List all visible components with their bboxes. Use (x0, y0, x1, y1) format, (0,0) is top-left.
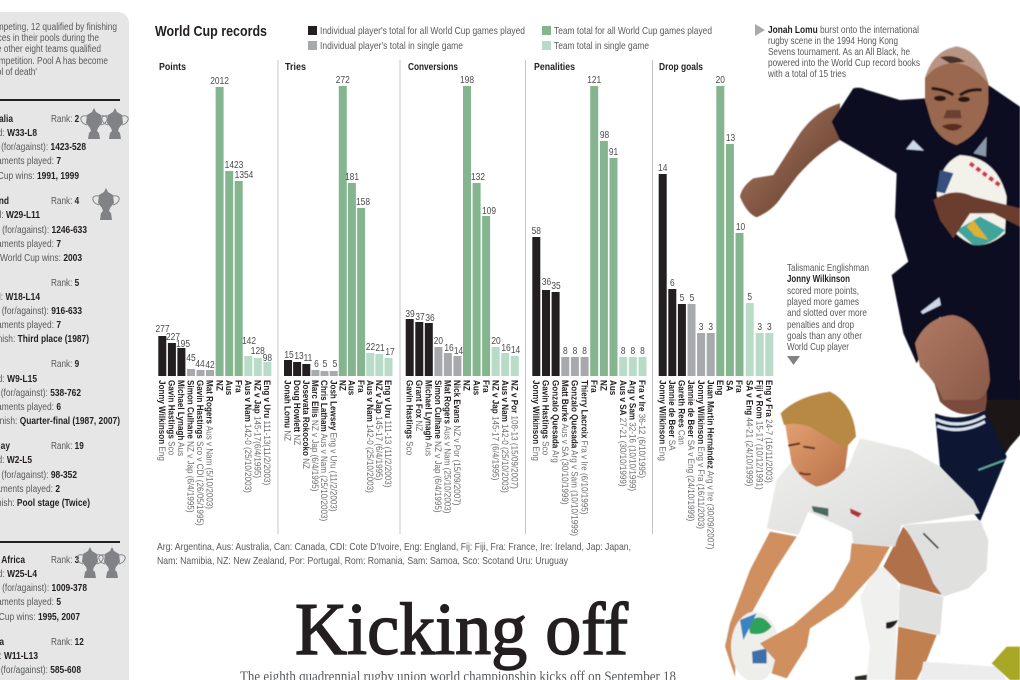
team: Wales: Rank: 5 (51, 276, 79, 288)
icon: trophies South Africa (77, 547, 125, 578)
labels: tries: Fra (356, 380, 366, 393)
values: tries: 272 (336, 74, 350, 86)
values: tries: 21 (375, 342, 385, 354)
labels: points: Aus (224, 380, 234, 395)
labels: drop goals: Fra (734, 380, 745, 393)
annotation: Jonah Lomu (755, 24, 920, 80)
values: drop goals: 3 (708, 321, 713, 333)
Wilkinson jersey (767, 438, 980, 547)
legend: Team total for all World Cup games played (554, 25, 712, 37)
values: drop goals: 5 (747, 291, 752, 303)
panel intro text (0, 21, 117, 78)
labels: points: Mat Rogers Aus v Nam (5/10/2003) (205, 380, 215, 509)
values: conversions: 37 (415, 311, 425, 323)
labels: drop goals: Gareth Rees Can (676, 380, 687, 445)
chart: drop goals (657, 62, 774, 550)
annotation: Jonah Lomu: rugby scene in the 1994 Hong Kong (768, 35, 898, 47)
values: tries: 181 (345, 171, 359, 183)
arrow: points down to Wilkinson (787, 356, 800, 365)
values: penalties: 121 (587, 74, 601, 86)
values: points: 128 (251, 345, 265, 357)
legend (308, 25, 712, 52)
bars: penalties (532, 86, 646, 376)
values: penalties: 8 (630, 345, 635, 357)
team: Samoa: Rank: 12 (51, 635, 84, 647)
team: Fiji: Rank: 9 (51, 357, 79, 369)
labels: penalties: Gavin Hastings Sco (541, 380, 551, 455)
values: penalties: 8 (582, 345, 587, 357)
values: drop goals: 13 (726, 132, 735, 144)
values: conversions: 198 (460, 74, 474, 86)
labels: points (157, 380, 273, 526)
labels: penalties: Fra (589, 380, 599, 393)
chart: conversions (404, 62, 520, 514)
labels: conversions (404, 380, 520, 514)
chart heading: Penalities: Penalities (534, 62, 575, 73)
labels: conversions: Nick Evans NZ v Por (15/09/2007) (452, 380, 463, 506)
Lomu head (925, 47, 988, 145)
annotation: Jonny Wilkinson: and slotted over more (787, 307, 867, 319)
annotation: Jonny Wilkinson: Jonny Wilkinson (787, 273, 850, 285)
icon: trophy England (93, 188, 119, 220)
team: Australia: Rank: 2 (51, 112, 79, 124)
labels: conversions: NZ v Por 108-13 (15/09/2007) (509, 380, 520, 489)
values: drop goals: 6 (670, 277, 675, 289)
annotation: Jonah Lomu: Jonah Lomu burst onto the international (768, 24, 919, 36)
legend: Individual player's total for all World Cup games played (320, 25, 525, 37)
labels: drop goals: Fiji v Rom 15-17 (10/12/1991) (754, 380, 765, 490)
labels: tries: NZ v Jap 145-17 (6/4/1995) (374, 380, 384, 480)
panel: pool teams (0, 12, 129, 680)
labels: points: Gavin Hastings Sco (166, 380, 177, 455)
values: penalties: 35 (551, 280, 561, 292)
labels: penalties: Gonzalo Quesada Arg (550, 380, 561, 463)
labels: tries: Marc Ellis NZ v Jap (6/4/1995) (310, 380, 321, 492)
labels: points: Jonny Wilkinson Eng (157, 380, 167, 461)
Lomu arm (740, 103, 840, 217)
team: Fiji (0, 357, 120, 427)
values: points: 98 (263, 352, 272, 364)
labels: penalties: Jonny Wilkinson Eng (531, 380, 541, 461)
values: points: 2012 (210, 75, 229, 87)
values: points: 1423 (225, 159, 243, 171)
team: England (0, 194, 87, 264)
Lomu jersey and shorts (832, 85, 1020, 400)
values: drop goals: 5 (690, 292, 694, 304)
labels: drop goals: SA (724, 380, 735, 392)
labels: drop goals: SA v Eng 44-21 (24/10/1999) (744, 380, 755, 486)
labels: drop goals (657, 380, 774, 550)
values: penalties: 98 (600, 129, 609, 141)
labels: penalties: Matt Burke Aus v SA (30/10/1999) (560, 380, 570, 505)
labels: tries: Chris Latham Aus v Nam (25/10/2003) (319, 380, 330, 521)
labels: tries: NZ (337, 380, 348, 391)
values: points: 45 (186, 352, 196, 364)
values: points: 42 (205, 359, 215, 371)
labels: tries: Josevata Rokocoko NZ (301, 380, 311, 470)
abbreviations note: Nam: Namibia, NZ: New Zealand, Por: Portugal, Rom: Romania, Sam: Samoa, Sco: Scotand Uru: Uruguay (157, 555, 569, 567)
Lomu kit logos (906, 137, 987, 314)
labels: penalties: Aus (608, 380, 619, 395)
values: points (155, 75, 272, 371)
values: penalties: 8 (573, 345, 577, 357)
values: conversions: 20 (491, 335, 501, 347)
values: tries: 6 (314, 358, 319, 370)
labels: penalties: Arg v Sam 32-16 (10/10/1999) (627, 380, 638, 491)
values: drop goals: 5 (680, 292, 684, 304)
labels: drop goals: Eng v Fra 24-7 (16/11/2003) (764, 380, 774, 483)
labels: points: Aus v Nam 142-0 (25/10/2003) (243, 380, 253, 493)
labels: conversions: Aus (471, 380, 482, 395)
labels: points: NZ (214, 380, 225, 391)
labels: drop goals: Jannie de Beer SA v Eng (24/10/1999) (686, 380, 697, 521)
chart heading: Drop goals: Drop goals (659, 62, 703, 73)
values: tries: 22 (366, 341, 375, 353)
values: tries: 5 (333, 358, 337, 370)
values: penalties: 36 (542, 276, 551, 288)
values: tries: 13 (294, 350, 304, 362)
values: drop goals: 20 (716, 74, 725, 86)
labels: penalties: NZ (598, 380, 609, 391)
heading: World Cup records: World Cup records (155, 23, 267, 40)
values: conversions: 109 (482, 205, 496, 217)
labels: penalties: Aus v SA 27-21 (30/10/1999) (618, 380, 628, 487)
annotation: Jonny Wilkinson: World Cup player (787, 341, 849, 353)
annotation: Jonny Wilkinson (787, 262, 869, 365)
labels: penalties: Gonzalo Quesada Arg v Sam (10/10/1999) (569, 380, 580, 536)
values: conversions (405, 74, 520, 357)
annotation: Jonny Wilkinson: played more games (787, 296, 859, 308)
labels: conversions: Michael Lynagh Aus (423, 380, 434, 457)
values: penalties (532, 74, 645, 357)
annotation: Jonny Wilkinson: Talismanic Englishman (787, 262, 869, 274)
team: Samoa (0, 635, 84, 680)
Lomu far leg and sock (933, 380, 1020, 522)
values: conversions: 36 (425, 312, 435, 324)
values: penalties: 8 (621, 345, 626, 357)
Wilkinson legs (855, 567, 1020, 680)
team: South Africa: Rank: 3 (51, 553, 79, 565)
Lomu rugby ball and hand (933, 155, 1020, 245)
team: England: Rank: 4 (51, 194, 80, 206)
values: tries (284, 74, 395, 370)
values: drop goals: 14 (658, 162, 667, 174)
values: tries: 11 (304, 352, 312, 364)
team: England: World Cup wins: 2003 (0, 252, 82, 264)
labels: points: Michael Lynagh Aus (176, 380, 187, 457)
photo: Jonah Lomu (740, 47, 1020, 522)
annotation: Jonny Wilkinson: scored more points, (787, 285, 859, 297)
values: drop goals: 3 (699, 321, 703, 333)
abbreviations note: Arg: Argentina, Aus: Australia, Can: Canada, CDI: Cote D'Ivoire, Eng: England, Fij: Fiji, Fra: France, Ire: Ireland, Jap: Japan, (157, 541, 631, 553)
Wilkinson thigh (883, 527, 942, 595)
values: tries: 5 (323, 358, 327, 370)
bars: tries (284, 86, 392, 376)
values: points: 44 (195, 358, 205, 370)
labels: tries: Aus (346, 380, 357, 395)
labels: penalties: Thierry Lacroix Fra v Ire (6/10/1995) (579, 380, 590, 515)
values: conversions: 16 (501, 342, 511, 354)
annotation: Jonny Wilkinson: goals than any other (787, 330, 862, 342)
chart: penalties (531, 62, 648, 536)
Wilkinson head (781, 392, 856, 487)
labels: tries: Doug Howlett NZ (292, 380, 302, 446)
values: conversions: 39 (405, 308, 415, 320)
labels: points: Fra (233, 380, 244, 393)
Wilkinson shorts (898, 520, 988, 635)
values: penalties: 8 (563, 345, 568, 357)
values: points: 1354 (235, 169, 253, 181)
annotation: Jonny Wilkinson: penalties and drop (787, 319, 854, 331)
values: conversions: 16 (444, 342, 454, 354)
labels: points: Eng v Uru 111-13(11/2/2003) (262, 380, 273, 485)
labels: tries: Aus v Nam 142-0 (25/10/2003) (365, 380, 375, 493)
abbreviations note (157, 541, 631, 567)
values: drop goals: 3 (767, 321, 772, 333)
labels: conversions: Grant Fox NZ (414, 380, 424, 432)
labels: penalties: Fra v Ire 36-12 (6/10/1995) (637, 380, 648, 478)
labels: penalties (531, 380, 648, 536)
values: drop goals: 3 (757, 321, 762, 333)
Wilkinson arms (725, 532, 797, 677)
labels: conversions: Fra (481, 380, 491, 393)
bars: drop goals (659, 86, 773, 376)
values: conversions: 14 (454, 345, 463, 357)
labels: points: Simon Culhane NZ v Jap (6/4/1995) (186, 380, 196, 513)
annotation: Jonah Lomu: with a total of 15 tries (767, 68, 846, 80)
values: points: 195 (176, 338, 190, 350)
labels: tries: Eng v Uru 111-13 (11/2/2003) (383, 380, 394, 488)
labels: drop goals: Jonny Wilkinson Eng v Fra (16/11/2003) (696, 380, 706, 529)
photo: Jonny Wilkinson (725, 392, 1020, 680)
values: penalties: 58 (532, 225, 541, 237)
legend: Individual player's total in single game (320, 40, 463, 52)
values: points: 227 (166, 331, 180, 343)
labels: conversions: NZ (462, 380, 472, 391)
labels: drop goals: Jonny Wilkinson Eng (657, 380, 668, 461)
labels: conversions: Gavin Hastings Sco (404, 380, 415, 455)
labels: conversions: NZ v Jap 145-17 (6/4/1995) (490, 380, 501, 480)
values: tries: 158 (356, 196, 370, 208)
team: Australia (0, 112, 86, 182)
team: Uruguay (0, 439, 90, 509)
bars: conversions (406, 86, 519, 376)
chart heading: Tries: Tries (285, 62, 306, 73)
labels: drop goals: Eng (715, 380, 725, 395)
values: conversions: 14 (511, 344, 520, 356)
labels: tries: Josh Lewsey Eng v Uru (11/2/2003) (328, 380, 339, 512)
bars: points (158, 87, 271, 376)
labels: drop goals: Juan Martin Hernández Arg v Ire (30/09/2007) (705, 380, 716, 550)
chart: points (155, 62, 273, 526)
Wilkinson rugby ball (731, 612, 779, 680)
team: South Africa (0, 553, 87, 623)
labels: drop goals: Jannie de Beer SA (667, 380, 677, 451)
annotation: Jonah Lomu: powered into the World Cup record books (768, 57, 920, 69)
values: conversions: 20 (434, 335, 443, 347)
values: drop goals (658, 74, 772, 333)
values: tries: 17 (385, 346, 395, 358)
team: Uruguay: Rank: 19 (51, 439, 84, 451)
title: Kicking off: Kicking off (295, 589, 628, 671)
icon: trophies Australia (81, 108, 128, 139)
labels: tries (283, 380, 394, 521)
arrow: points right to Lomu text (755, 24, 765, 36)
legend: Team total in single game (554, 40, 649, 52)
annotation: Jonah Lomu: Sevens tournament. As an All Black, he (768, 46, 910, 58)
values: conversions: 132 (471, 171, 485, 183)
chart heading: Conversions: Conversions (408, 62, 458, 73)
labels: conversions: Mat Rogers Aus v Nam (25/10/2003) (442, 380, 453, 514)
labels: tries: Jonah Lomu NZ (283, 380, 293, 442)
chart heading: Points: Points (159, 62, 186, 73)
values: penalties: 91 (609, 146, 618, 158)
values: drop goals: 10 (736, 221, 745, 233)
labels: points: NZ v Jap 145-17(6/4/1995) (252, 380, 263, 478)
labels: conversions: Aus v Nam 142-0 (25/10/2003) (500, 380, 510, 493)
labels: points: Gavin Hastings Sco v CDI (26/05/1995) (195, 380, 206, 526)
labels: conversions: Simon Culhane NZ v Jap (6/4/1995) (433, 380, 444, 513)
values: points: 142 (242, 335, 256, 347)
Lomu thigh (915, 315, 990, 400)
chart: tries (283, 62, 395, 521)
values: tries: 15 (284, 349, 294, 361)
team: Wales (0, 276, 89, 345)
values: points: 277 (155, 323, 170, 335)
values: penalties: 8 (640, 345, 645, 357)
